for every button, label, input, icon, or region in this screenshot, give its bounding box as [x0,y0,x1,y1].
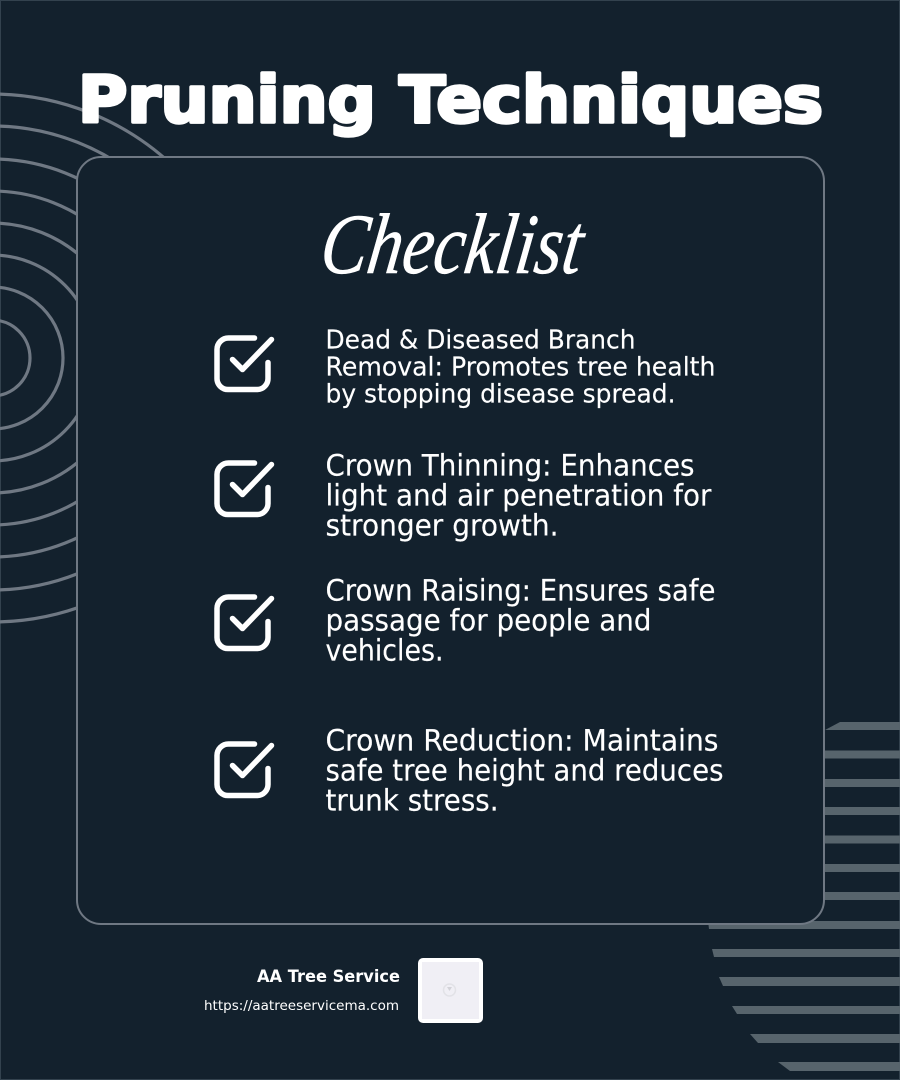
item 4 [217,724,724,818]
text: crown raising [326,574,716,668]
item 3 [217,574,716,668]
item 2 [217,448,712,542]
text: crown reduction: trunk stress. [326,784,498,818]
text: crown reduction: safe tree height and reduces [326,754,724,788]
text: crown reduction: Crown Reduction: Maintains [326,724,718,758]
text: crown raising: vehicles. [326,634,444,668]
text: crown thinning: stronger growth. [326,508,558,542]
text: crown reduction [326,724,724,818]
text: crown raising: passage for people and [326,604,652,638]
title: Pruning Techniques [78,64,823,138]
footer [204,958,483,1023]
text: dead and diseased branch removal: Dead & Diseased Branch [326,326,636,356]
heading: checklist: Checklist [315,196,591,292]
panel: checklist [77,157,824,924]
text: dead and diseased branch removal: by stopping disease spread. [326,380,676,410]
text: crown thinning: light and air penetration for [326,478,712,512]
item 1 [217,326,716,410]
text: dead and diseased branch removal [326,326,716,410]
text: crown thinning: Crown Thinning: Enhances [326,448,694,482]
striped decoration [708,722,900,1071]
logo tile [418,958,483,1023]
website url: https://aatreeservicema.com [204,998,399,1014]
icon: checkbox 4 [217,744,272,796]
text: dead and diseased branch removal: Removal: Promotes tree health [326,352,716,382]
text: crown raising: Crown Raising: Ensures safe [326,574,716,608]
concentric ring decoration [0,94,256,622]
brand name: AA Tree Service [257,967,400,987]
icon: checkbox 3 [217,597,272,649]
text: crown thinning [326,448,712,542]
icon: checkbox 1 [217,338,272,390]
icon: checkbox 2 [217,463,272,515]
